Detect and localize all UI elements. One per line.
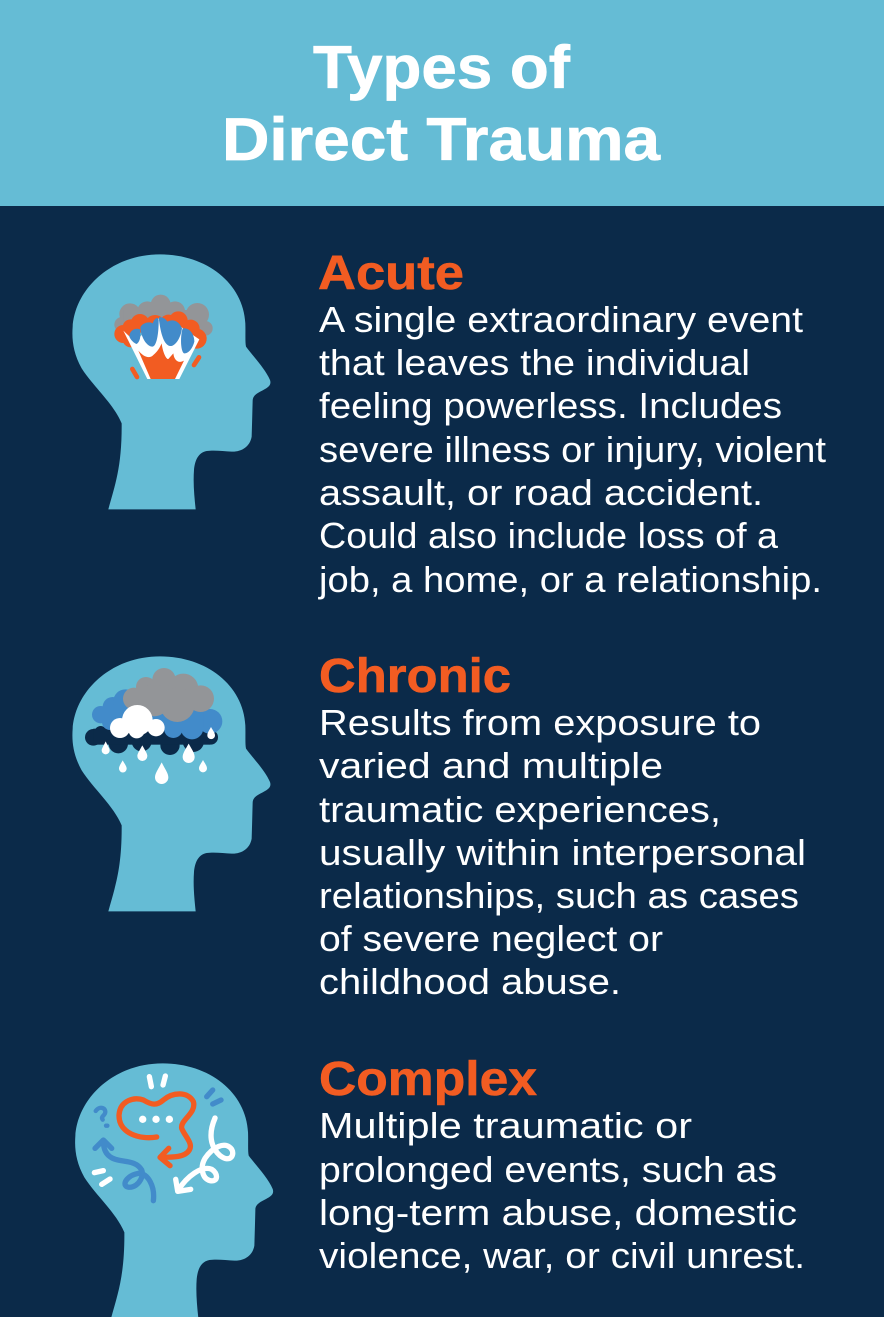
heading: acute: Acute <box>318 247 464 300</box>
text: complex description: long-term abuse, domestic <box>319 1192 797 1233</box>
text: acute description: feeling powerless. Includes <box>319 385 782 426</box>
dark cloud <box>85 726 218 755</box>
text: acute description: job, a home, or a relationship. <box>318 559 822 600</box>
text: complex description: prolonged events, such as <box>319 1149 777 1190</box>
smoke cloud <box>114 295 213 336</box>
rain drops <box>102 727 215 784</box>
text: chronic description: varied and multiple <box>319 745 663 786</box>
text: chronic description: usually within interpersonal <box>319 832 806 873</box>
text: acute description: A single extraordinary event <box>319 299 803 340</box>
orange fireball <box>114 311 207 349</box>
white tangled arrow <box>176 1118 233 1191</box>
white cloud <box>110 705 165 738</box>
blue tick marks <box>207 1090 221 1104</box>
panel: chronic <box>72 650 806 1002</box>
text: acute description <box>318 299 826 600</box>
header band <box>0 0 884 206</box>
text: complex description: violence, war, or civil unrest. <box>319 1235 805 1276</box>
title <box>222 34 661 173</box>
icon: head with storm clouds <box>72 656 270 911</box>
text: acute description: severe illness or injury, violent <box>319 429 826 470</box>
blue plume <box>129 317 194 353</box>
icon: head with explosion <box>72 254 270 509</box>
text: chronic description: of severe neglect or <box>319 918 663 959</box>
text: chronic description <box>319 702 806 1002</box>
orange flame core <box>138 343 184 379</box>
blue cloud <box>92 689 222 739</box>
text: chronic description: traumatic experiences, <box>319 789 721 830</box>
text: chronic description: relationships, such as cases <box>319 875 799 916</box>
panel: acute <box>72 247 826 600</box>
ellipsis dots <box>139 1116 173 1123</box>
grey cloud <box>123 668 214 722</box>
title: Types of <box>313 34 571 101</box>
blue tangled arrow <box>95 1140 154 1201</box>
text: chronic description: childhood abuse. <box>319 961 621 1002</box>
text: acute description: that leaves the individual <box>319 342 750 383</box>
title: Direct Trauma <box>222 106 661 173</box>
text: acute description: assault, or road accident. <box>319 472 763 513</box>
heading: complex: Complex <box>319 1053 537 1106</box>
heading: chronic: Chronic <box>319 650 511 703</box>
text: acute description: Could also include loss of a <box>319 515 779 556</box>
white burst <box>123 318 199 379</box>
text: complex description <box>319 1105 805 1276</box>
icon: head with tangled arrows <box>75 1063 273 1317</box>
text: complex description: Multiple traumatic or <box>319 1105 692 1146</box>
white tick marks <box>94 1076 165 1184</box>
debris sparks <box>132 357 199 377</box>
panel: complex <box>75 1053 805 1317</box>
blue question mark <box>96 1108 107 1126</box>
orange tangled arrow <box>119 1094 194 1166</box>
text: chronic description: Results from exposure to <box>319 702 761 743</box>
